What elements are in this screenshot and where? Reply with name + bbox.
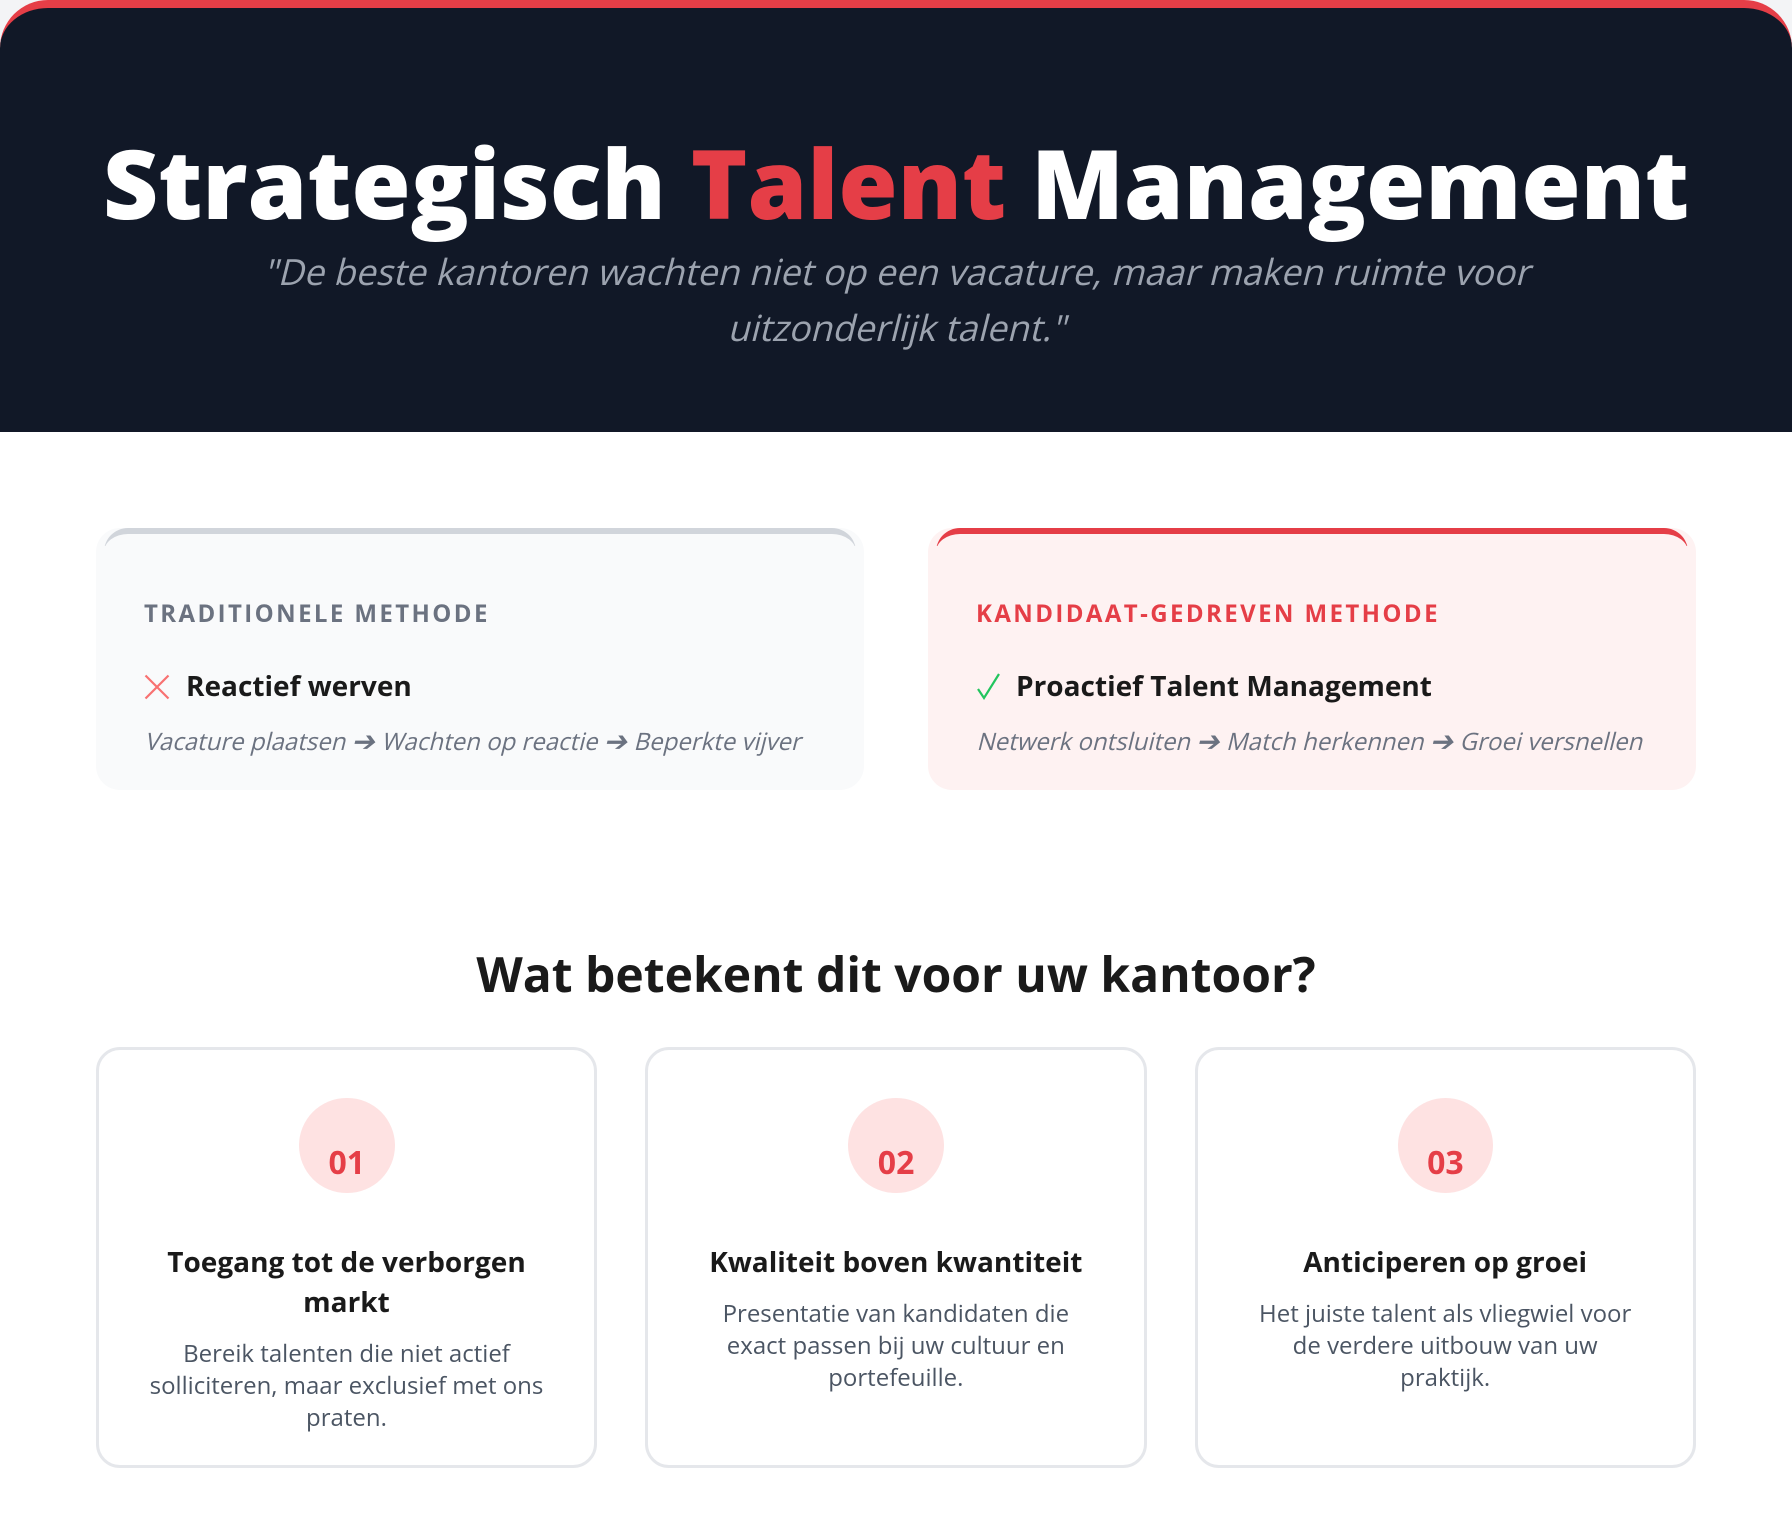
number badge 02 <box>848 1098 944 1193</box>
panel: traditional method <box>104 528 856 756</box>
benefit title: Kwaliteit boven kwantiteit <box>709 1243 1082 1281</box>
subtitle quote <box>260 247 1539 352</box>
benefit text <box>1259 1296 1631 1394</box>
benefit title: markt <box>303 1283 390 1321</box>
process flow: Vacature plaatsen ➔ Wachten op reactie ➔ Beperkte vijver <box>142 722 807 760</box>
number badge 02: 02 <box>878 1140 914 1184</box>
benefit text: Het juiste talent als vliegwiel voor <box>1259 1296 1631 1330</box>
benefit text: exact passen bij uw cultuur en <box>727 1328 1065 1362</box>
top accent bar <box>104 528 856 546</box>
benefit title: Anticiperen op groei <box>1303 1243 1587 1281</box>
method name: Proactief Talent Management <box>1016 667 1432 705</box>
benefit text: Presentatie van kandidaten die <box>723 1296 1069 1330</box>
benefit text: de verdere uitbouw van uw <box>1293 1328 1598 1362</box>
benefit text: solliciteren, maar exclusief met ons <box>150 1368 543 1402</box>
subtitle quote: uitzonderlijk talent." <box>725 303 1075 352</box>
benefit text <box>723 1296 1069 1394</box>
benefit title <box>167 1243 526 1321</box>
top accent bar <box>936 528 1688 546</box>
number badge 01 <box>299 1098 394 1193</box>
number badge 03: 03 <box>1427 1140 1464 1184</box>
benefit title: Toegang tot de verborgen <box>167 1243 526 1281</box>
benefit text: praktijk. <box>1400 1360 1490 1394</box>
icon: cross <box>144 674 170 700</box>
label: KANDIDAAT-GEDREVEN METHODE <box>976 597 1440 630</box>
panel: benefit 1 <box>96 1046 597 1468</box>
benefit text <box>150 1336 543 1434</box>
panel: candidate-driven method <box>928 528 1696 790</box>
panel: header <box>0 0 1792 432</box>
page corner background <box>0 0 1792 60</box>
icon: check <box>977 673 1000 700</box>
number badge 01: 01 <box>328 1140 365 1184</box>
benefit text: Bereik talenten die niet actief <box>183 1336 510 1370</box>
label: TRADITIONELE METHODE <box>144 597 490 630</box>
benefit text: praten. <box>306 1400 387 1434</box>
title: Strategisch Talent Management <box>103 117 1689 248</box>
benefit text: portefeuille. <box>828 1360 963 1394</box>
panel: benefit 3 <box>1195 1046 1696 1468</box>
section heading: Wat betekent dit voor uw kantoor? <box>476 942 1316 1007</box>
panel: benefit 2 <box>645 1046 1147 1468</box>
method name: Reactief werven <box>186 667 412 705</box>
subtitle quote: "De beste kantoren wachten niet op een vacature, maar maken ruimte voor <box>260 247 1539 296</box>
process flow: Netwerk ontsluiten ➔ Match herkennen ➔ Groei versnellen <box>974 722 1648 760</box>
number badge 03 <box>1398 1098 1493 1193</box>
